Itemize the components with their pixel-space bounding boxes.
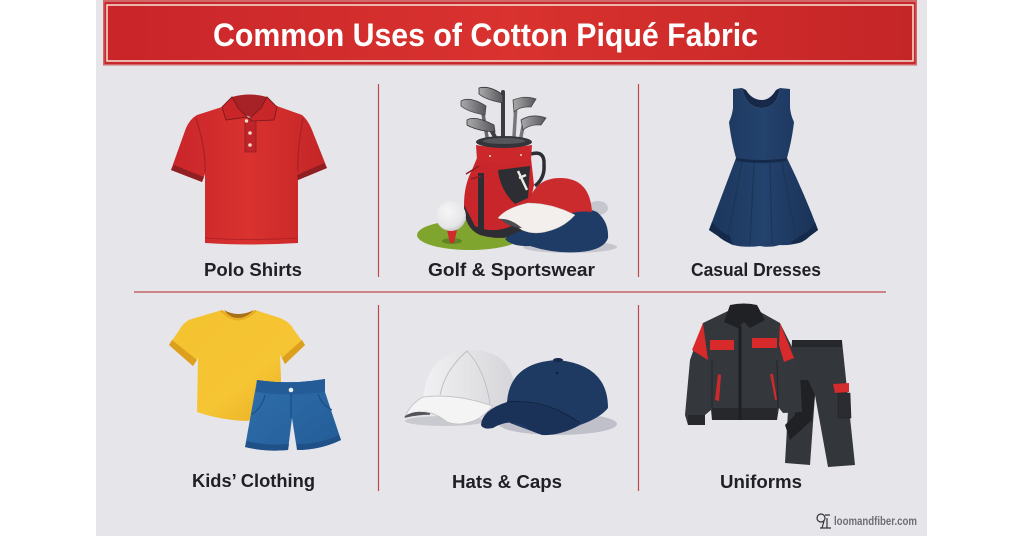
icon: spinning wheel <box>817 514 831 528</box>
panel: hats and caps <box>405 350 617 492</box>
label: polo shirts: Polo Shirts <box>204 259 302 280</box>
panel: polo shirts <box>171 94 327 280</box>
icon: black and red jacket with trousers <box>685 304 855 467</box>
panel: casual dresses <box>691 88 821 280</box>
watermark <box>817 514 917 528</box>
watermark text: loomandfiber.com <box>834 514 917 528</box>
panel: golf and sportswear <box>417 87 617 280</box>
label: hats and caps: Hats & Caps <box>452 471 562 492</box>
label: kids clothing: Kids’ Clothing <box>192 470 315 491</box>
icon: white cap and navy cap <box>405 350 617 435</box>
title banner <box>103 0 917 66</box>
panel: uniforms <box>685 304 855 492</box>
icon: red polo shirt <box>171 94 327 244</box>
grid dividers <box>134 84 886 491</box>
panel: kids clothing <box>169 310 341 491</box>
icon: navy dress <box>709 88 818 247</box>
label: uniforms: Uniforms <box>720 471 802 492</box>
icon: golf bag, ball, caps <box>417 87 617 253</box>
label: golf and sportswear: Golf & Sportswear <box>428 259 595 280</box>
icon: yellow tee and blue shorts <box>169 310 341 451</box>
label: casual dresses: Casual Dresses <box>691 259 821 280</box>
title text: Common Uses of Cotton Piqué Fabric <box>213 17 758 53</box>
